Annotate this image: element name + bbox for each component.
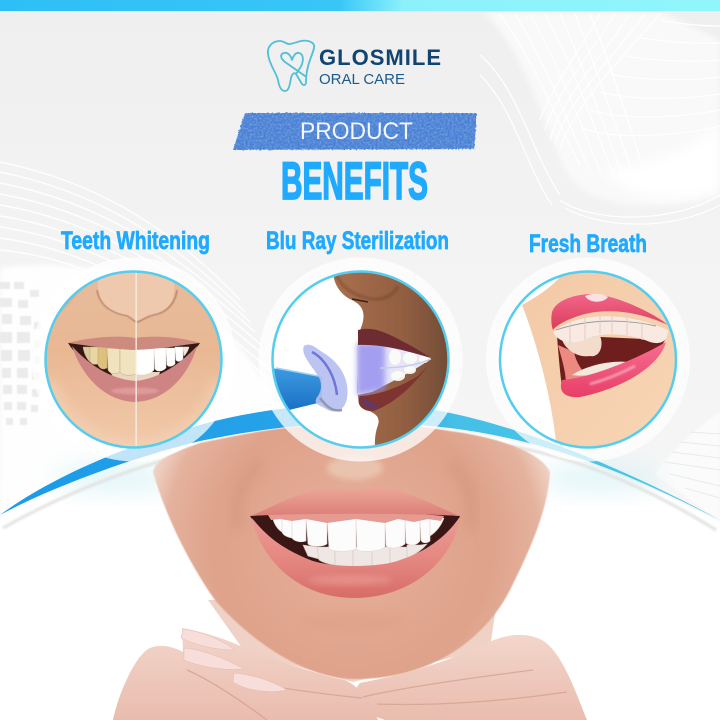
circle: fresh breath [486, 258, 690, 462]
yellow teeth half [83, 347, 136, 375]
lower teeth [303, 544, 427, 568]
small lower teeth [110, 372, 160, 381]
left hand [113, 628, 378, 720]
soft white area under the arc [0, 425, 720, 720]
mouth interior [250, 513, 460, 566]
circle: blu ray sterilization [258, 258, 462, 462]
circle: teeth whitening [32, 258, 236, 462]
background waves: left [0, 162, 300, 520]
blue arc [0, 404, 720, 530]
whitening device [272, 345, 348, 412]
lower lip [72, 346, 197, 402]
glowing tray and teeth [357, 343, 431, 395]
mouth interior [557, 336, 665, 384]
logo: wordmark: ORAL CARE [319, 71, 405, 88]
background waves: lower right [655, 412, 720, 522]
lower lip [561, 342, 666, 397]
lower lip [359, 366, 428, 411]
upper lip [250, 488, 460, 516]
nails [181, 629, 287, 692]
upper teeth [553, 316, 668, 343]
label: blu ray sterilization: Blu Ray Sterilization [266, 227, 449, 255]
mouth interior [68, 343, 200, 381]
logo: wordmark [319, 45, 441, 88]
face profile [334, 272, 448, 445]
model photo: smiling face and hands [113, 424, 587, 720]
white teeth half [136, 347, 189, 375]
heading banner: product: PRODUCT [300, 118, 413, 145]
upper lip [358, 329, 431, 358]
nose shadow under circle [327, 456, 383, 480]
logo: wordmark: GLOSMILE [319, 45, 441, 70]
lower teeth [572, 362, 628, 376]
upper back teeth [562, 336, 602, 356]
heading banner: product [233, 113, 476, 150]
upper lip [551, 294, 668, 330]
label: teeth whitening: Teeth Whitening [61, 227, 210, 255]
nose [98, 272, 174, 322]
right hand [354, 635, 587, 720]
logo: tooth icon [268, 41, 314, 91]
heading: benefits: BENEFITS [281, 152, 428, 211]
top accent bar [0, 0, 720, 11]
outer cheeks [62, 294, 78, 310]
upper teeth [272, 516, 444, 551]
divider [136, 270, 137, 450]
chin shading [50, 382, 217, 434]
background waves: top right [480, 12, 720, 224]
finger creases [187, 670, 567, 720]
neck [208, 600, 497, 682]
gum line [268, 513, 444, 523]
skin [522, 268, 680, 452]
label: fresh breath: Fresh Breath [529, 230, 647, 258]
cheek shadows [237, 462, 262, 530]
lower lip [252, 518, 459, 598]
face shape [153, 424, 550, 679]
upper lip [68, 337, 200, 350]
